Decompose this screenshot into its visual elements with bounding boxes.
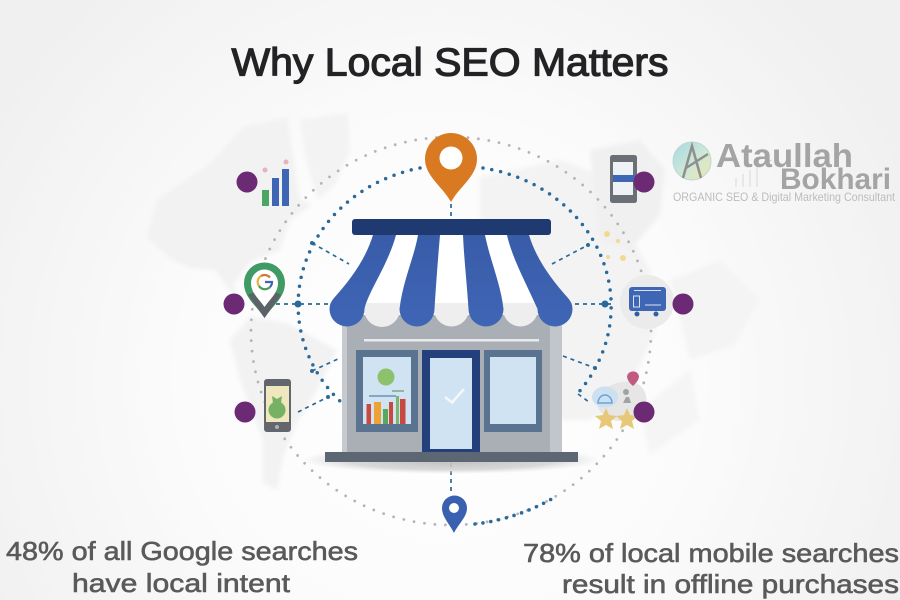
stat: offline purchases: 78% of local mobile searches [523, 538, 899, 568]
title: Why Local SEO Matters [232, 42, 668, 84]
logo: Ataullah Bokhari: Ataullah [716, 137, 853, 174]
logo: Ataullah Bokhari: Bokhari [780, 163, 891, 196]
awning white stripes [352, 235, 550, 303]
connector nodes [294, 241, 608, 399]
icon: orange location pin [425, 133, 477, 202]
purple markers [224, 172, 694, 422]
stat: local intent: have local intent [72, 568, 291, 598]
building wall [342, 315, 562, 452]
logo: Ataullah Bokhari [673, 137, 896, 204]
stat: offline purchases [523, 538, 899, 599]
sign line [364, 339, 539, 342]
decorative gold sparkles [604, 231, 626, 261]
icon: blue location pin [442, 496, 467, 533]
connector lines [276, 204, 613, 492]
world map background [147, 113, 760, 490]
right window [484, 350, 542, 432]
outer ring blue segment [475, 497, 555, 524]
outer dotted ring [251, 137, 651, 525]
storefront [301, 219, 601, 474]
door [422, 350, 480, 452]
awning white scallops [364, 303, 538, 327]
roof bar [352, 219, 551, 235]
base step [325, 452, 578, 462]
ground shadow [301, 446, 601, 474]
icon: phone with money bag [264, 379, 291, 432]
inner dotted ring right [483, 168, 611, 393]
icon: phone top right [610, 155, 641, 203]
stat: local intent [6, 536, 358, 598]
icon: bar chart [262, 160, 289, 206]
icon: Google map pin [244, 262, 285, 318]
inner dotted ring left [298, 168, 420, 403]
awning blue stripes [330, 235, 572, 326]
stat: local intent: 48% of all Google searches [6, 536, 358, 566]
left window with chart [356, 350, 418, 432]
icon: credit card [620, 275, 674, 329]
icon: reviews cluster [592, 371, 647, 429]
stat: offline purchases: result in offline purchases [562, 569, 899, 599]
